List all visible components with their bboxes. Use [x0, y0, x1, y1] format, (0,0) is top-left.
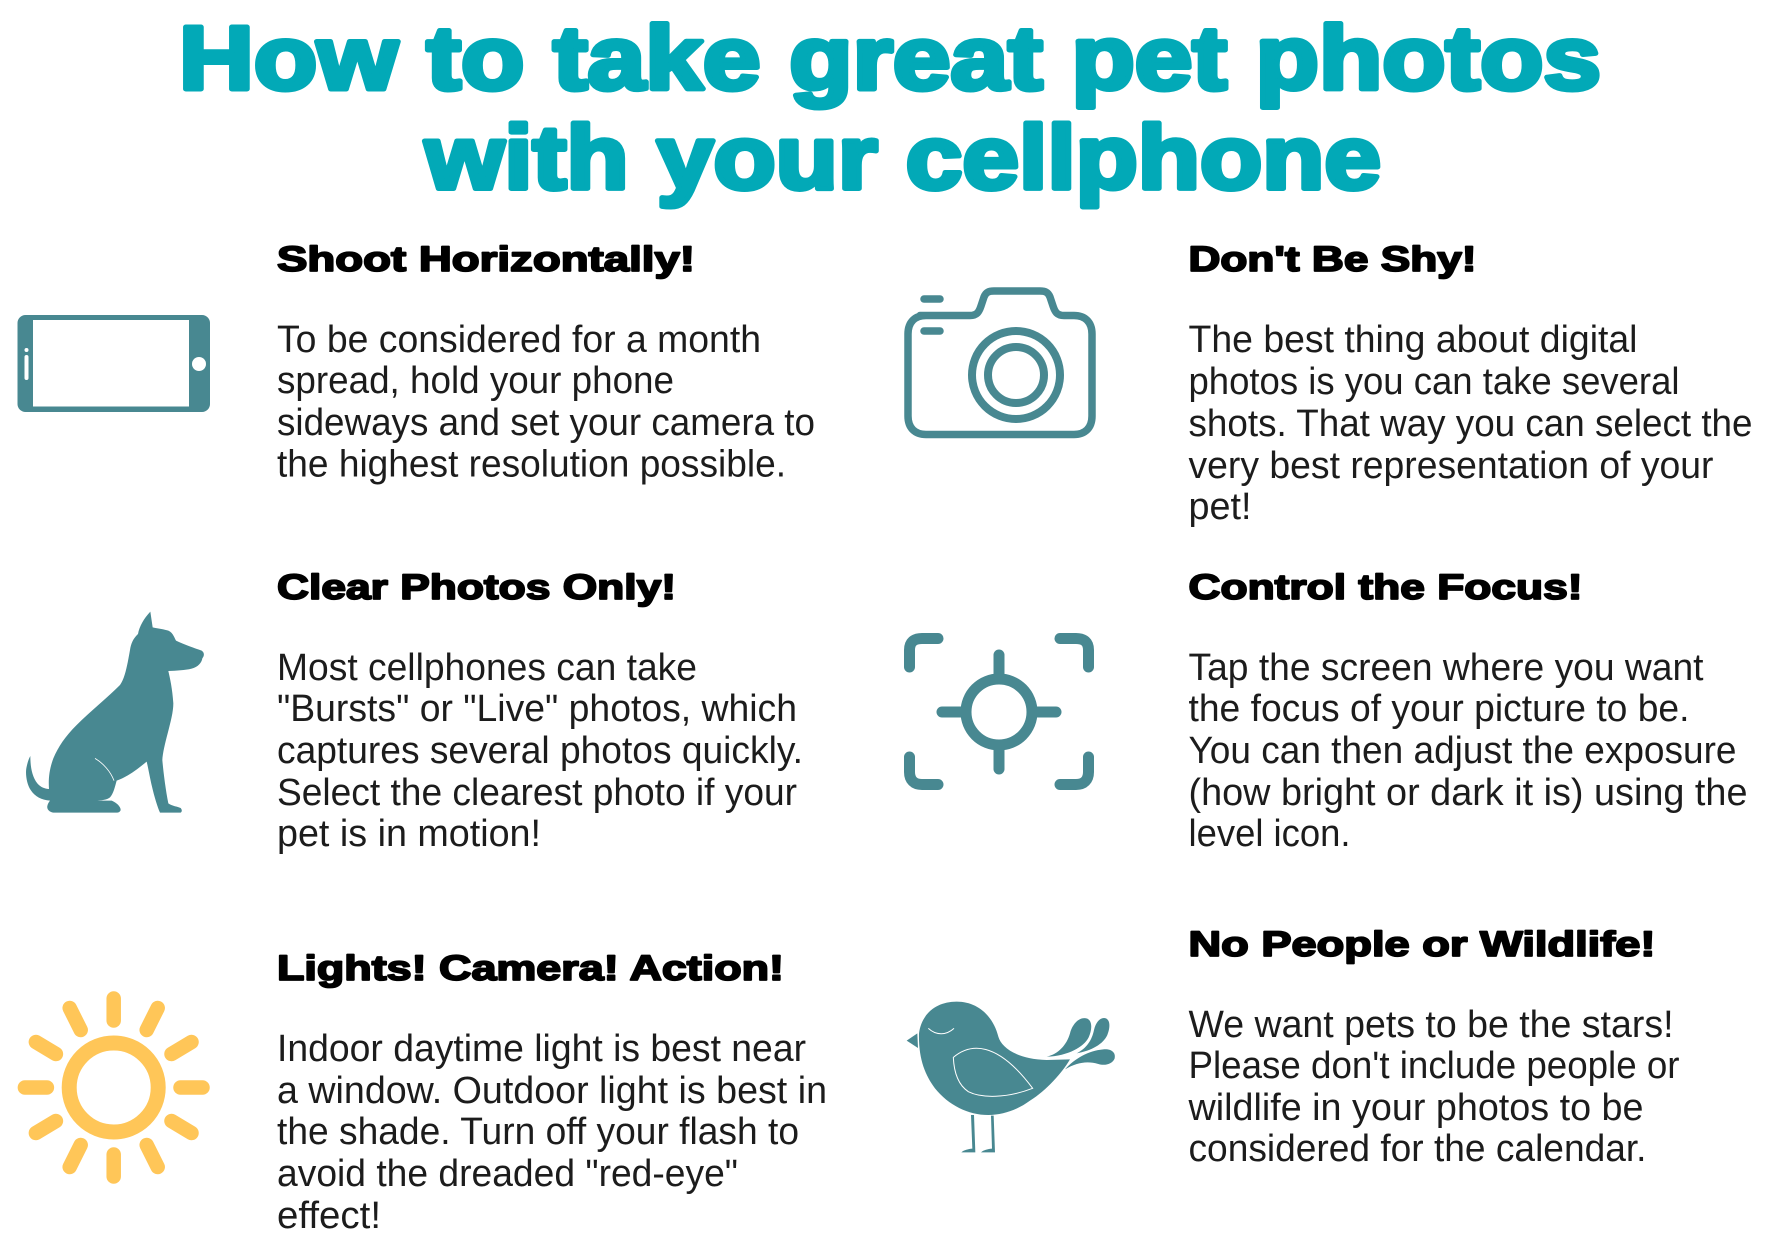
- text: clear photos body: Select the clearest photo if your: [277, 772, 797, 814]
- text: control the focus body: level icon.: [1188, 813, 1350, 855]
- text: don't be shy body: photos is you can take several: [1188, 361, 1680, 403]
- text: control the focus body: the focus of your picture to be.: [1188, 688, 1690, 730]
- heading: no people or wildlife: No People or Wildlife!: [1188, 925, 1656, 964]
- panel: don't be shy: [908, 240, 1752, 528]
- text: lights body: avoid the dreaded "red-eye": [277, 1153, 738, 1195]
- text: lights body: Indoor daytime light is best near: [277, 1028, 806, 1070]
- text: don't be shy body: pet!: [1188, 486, 1252, 528]
- text: clear photos body: [277, 647, 803, 855]
- title: [179, 9, 1601, 208]
- text: lights body: effect!: [277, 1195, 381, 1237]
- icon: phone held sideways: [18, 315, 210, 412]
- heading: don't be shy: Don't Be Shy!: [1188, 240, 1476, 279]
- title: How to take great pet photos: [179, 9, 1601, 109]
- text: don't be shy body: [1188, 319, 1752, 528]
- text: don't be shy body: The best thing about digital: [1188, 319, 1638, 361]
- icon: sitting dog: [26, 612, 204, 813]
- icon: camera: [908, 291, 1092, 434]
- panel: no people or wildlife: [907, 925, 1680, 1170]
- text: clear photos body: pet is in motion!: [277, 813, 541, 855]
- text: lights body: [277, 1028, 827, 1237]
- text: lights body: a window. Outdoor light is best in: [277, 1070, 827, 1112]
- heading: shoot horizontally: Shoot Horizontally!: [277, 240, 695, 279]
- text: shoot horizontally body: To be considered for a month: [277, 319, 761, 361]
- text: no people body: Please don't include people or: [1188, 1045, 1680, 1087]
- text: no people body: We want pets to be the stars!: [1188, 1004, 1674, 1046]
- icon: bird: [907, 1002, 1115, 1152]
- text: don't be shy body: shots. That way you can select the: [1188, 403, 1752, 445]
- text: lights body: the shade. Turn off your flash to: [277, 1111, 799, 1153]
- text: shoot horizontally body: sideways and set your camera to: [277, 402, 815, 444]
- title: with your cellphone: [424, 108, 1381, 208]
- text: clear photos body: captures several photos quickly.: [277, 730, 803, 772]
- icon: focus target: [910, 638, 1088, 784]
- text: no people body: wildlife in your photos to be: [1188, 1087, 1644, 1129]
- text: shoot horizontally body: the highest resolution possible.: [277, 444, 786, 486]
- heading: lights camera action: Lights! Camera! Action!: [277, 949, 784, 988]
- text: don't be shy body: very best representation of your: [1188, 445, 1714, 487]
- text: clear photos body: Most cellphones can take: [277, 647, 697, 689]
- text: no people body: considered for the calendar.: [1188, 1128, 1646, 1170]
- heading: clear photos only: Clear Photos Only!: [277, 568, 676, 607]
- text: no people body: [1188, 1004, 1680, 1170]
- text: shoot horizontally body: spread, hold your phone: [277, 360, 674, 402]
- panel: control the focus: [910, 568, 1748, 855]
- panel: lights camera action: [25, 949, 827, 1237]
- text: control the focus body: You can then adjust the exposure: [1188, 730, 1736, 772]
- text: shoot horizontally body: [277, 319, 815, 486]
- text: control the focus body: Tap the screen where you want: [1188, 647, 1704, 689]
- panel: shoot horizontally: [18, 240, 815, 486]
- heading: control the focus: Control the Focus!: [1188, 568, 1582, 607]
- icon: sun: [25, 998, 203, 1176]
- text: clear photos body: "Bursts" or "Live" photos, which: [277, 688, 797, 730]
- text: control the focus body: (how bright or dark it is) using the: [1188, 772, 1748, 814]
- panel: clear photos only: [26, 568, 803, 855]
- text: control the focus body: [1188, 647, 1748, 855]
